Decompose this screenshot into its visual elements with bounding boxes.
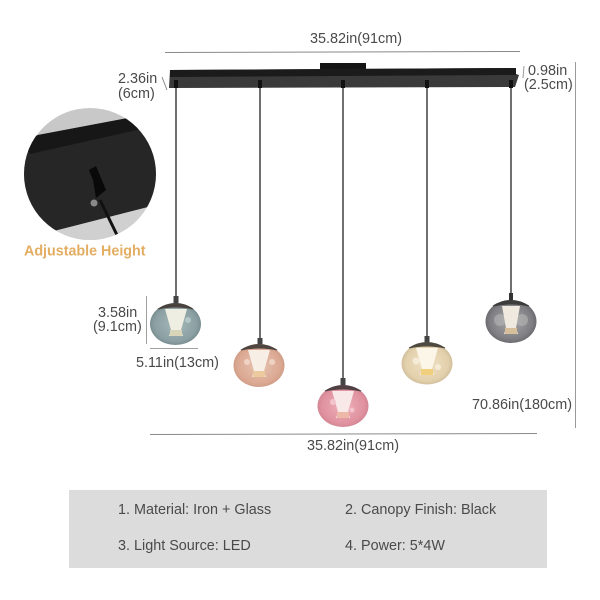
canopy height dimension left: (6cm) (118, 86, 155, 102)
top width dimension: 35.82in(91cm) (310, 31, 402, 47)
canopy height dimension right: (2.5cm) (524, 77, 573, 93)
globe height dimension: 3.58in (98, 305, 137, 321)
globe height dimension (93, 296, 146, 344)
lamp 5: smoke (486, 88, 536, 343)
adjustable height label: Adjustable Height (24, 244, 146, 260)
canopy height dimension left (118, 71, 167, 102)
globe height dimension: (9.1cm) (93, 319, 142, 335)
lamp 3: pink (318, 88, 368, 427)
spec: canopy finish: 2. Canopy Finish: Black (345, 502, 497, 518)
total height dimension: 70.86in(180cm) (472, 397, 572, 413)
spec: light source: 3. Light Source: LED (118, 538, 251, 554)
canopy height dimension left: 2.36in (118, 71, 157, 87)
lamp 4: amber (402, 88, 452, 384)
lamp 2: peach (234, 88, 284, 387)
spec: power: 4. Power: 5*4W (345, 538, 445, 554)
detail inset: adjustable height (24, 108, 156, 240)
canopy height dimension right (523, 63, 573, 93)
globe width dimension: 5.11in(13cm) (136, 355, 219, 371)
canopy height dimension right: 0.98in (528, 63, 567, 79)
bottom width dimension: 35.82in(91cm) (307, 438, 399, 454)
spec: material: 1. Material: Iron + Glass (118, 502, 271, 518)
lamp 1: blue-grey (150, 88, 201, 345)
specification panel (69, 490, 547, 568)
canopy bar (169, 63, 519, 88)
